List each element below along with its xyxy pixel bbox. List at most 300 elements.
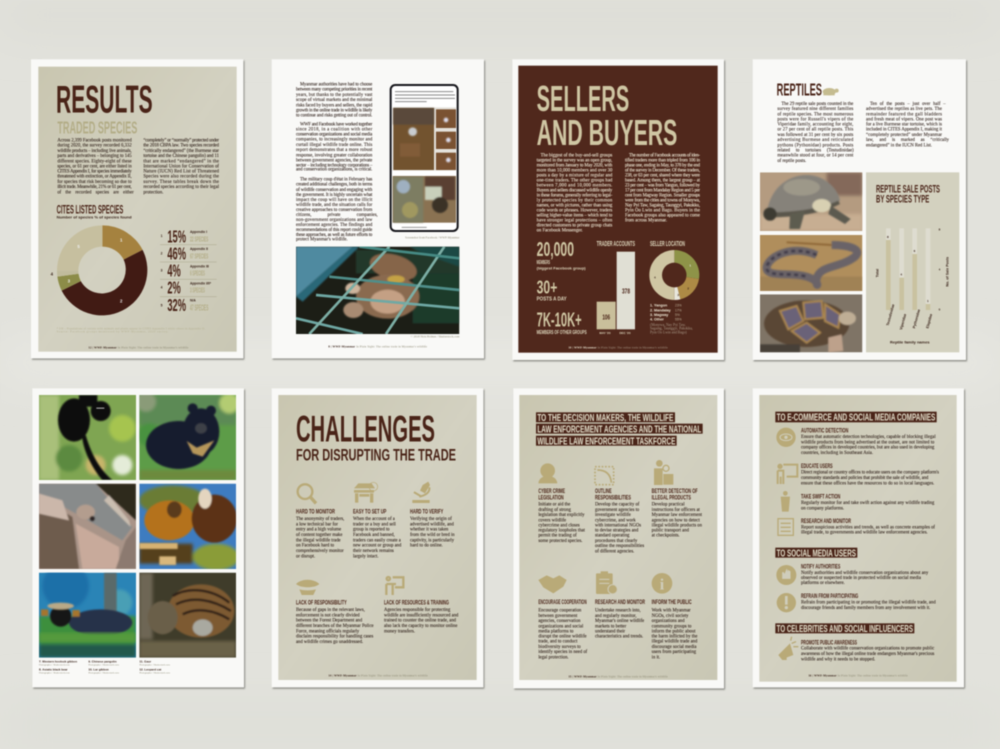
body text: curtail illegal wildlife trade online. This — [296, 143, 373, 148]
body text: WWF and Facebook have worked together — [300, 122, 373, 127]
title: challenges: FOR DISRUPTING THE TRADE — [296, 446, 456, 465]
key stats: POSTS A DAY — [537, 297, 567, 303]
column: lack of responsibility: enforcement is not clearly divided — [296, 613, 360, 618]
banner: social media users: TO SOCIAL MEDIA USERS — [777, 548, 856, 559]
icon: police hat — [296, 580, 319, 595]
photo: caged bear — [295, 246, 460, 335]
table: appendix percentages: 22 SPECIES — [190, 234, 208, 243]
column: lack of responsibility: different branches of the Myanmar Police — [296, 624, 374, 629]
table: appendix percentages: Appendix II — [190, 247, 208, 251]
body text: non-government organizations and law — [296, 218, 373, 223]
photo captions — [39, 660, 170, 674]
column: outline responsibilities: investigate wildlife — [595, 513, 631, 518]
column: hard to verify: captivity, is particularly — [410, 538, 455, 543]
icon: exclamation — [777, 593, 796, 612]
body text columns: endangered” in the IUCN Red List. — [866, 143, 932, 148]
photo captions: 8. Asiatic black bear — [39, 667, 68, 671]
photo: tortoise — [759, 172, 863, 232]
icon: person — [781, 491, 790, 512]
donut: seller location: 2 — [687, 286, 689, 290]
key stats: (biggest Facebook group) — [537, 266, 586, 270]
title: challenges: CHALLENGES — [296, 408, 435, 450]
photo captions: Photographer / Shutterstock.com — [88, 671, 119, 674]
body text columns: were from the cities and towns of Monywa, — [625, 199, 700, 204]
column: better detection: agencies on how to detect — [652, 518, 700, 523]
column: easy to set up: trader or a buy and sell — [353, 522, 397, 527]
panel: reptile bar chart: 8 — [887, 235, 889, 239]
body text columns: advertised the reptiles as live pets. The — [866, 107, 942, 112]
item: promote public awareness: awareness of how the illegal online trade endangers Myanmar's precious — [801, 652, 935, 657]
body text: Myanmar authorities have had to choose — [300, 83, 372, 88]
icon: megaphone — [778, 637, 798, 660]
column: encourage cooperation: trade, and to conduct — [538, 640, 578, 645]
body text columns: survey. These tables break down the — [143, 180, 219, 185]
icon: training — [386, 577, 403, 595]
column: cyber crime legislation: drafting of strong — [538, 508, 572, 513]
body text columns: between 7,000 and 10,000 members. — [537, 184, 612, 189]
column: encourage cooperation: identify species in need of — [538, 650, 588, 655]
item: take swift action: on company platforms. — [801, 506, 844, 511]
body text columns: of reptile species. The most numerous — [777, 112, 854, 117]
column: lack of resources and training: LACK OF RESOURCES & TRAINING — [384, 600, 449, 607]
body text: wildlife trade, and the situation calls for — [296, 203, 373, 208]
subheading: Number of species % of species found — [57, 214, 132, 219]
panel: reptile bar chart: BY SPECIES TYPE — [876, 194, 929, 206]
column: hard to monitor: on Facebook hard to — [296, 544, 335, 549]
donut: seller location: 3 — [677, 293, 679, 297]
column: lack of responsibility: Force, meaning officials regularly — [296, 629, 360, 634]
photo captions: 11. Gaur — [139, 660, 152, 664]
column: research and monitor — [595, 599, 645, 640]
photo captions: Photographer / Shutterstock.com — [139, 664, 170, 667]
body text: risks faced by buyers and sellers, the rapid — [296, 103, 373, 108]
item: educate users: ensure that these offices have the resources to do so in local languages. — [801, 481, 934, 486]
body text columns: Buyers and sellers discussed wildlife openly — [537, 189, 613, 194]
phone screenshot — [391, 85, 458, 231]
footer: 16 | WWF-Myanmar In Plain Sight: The online trade in Myanmar's wildlife — [808, 673, 908, 677]
headline banner: TO THE DECISION MAKERS, THE WILDLIFE — [537, 413, 674, 424]
panel: reptile bar chart: 6 — [914, 249, 916, 253]
bar chart: trader accounts: 106 — [602, 312, 610, 321]
body text columns: posts a day by a mixture of regular and — [537, 174, 613, 179]
title: results: RESULTS — [56, 78, 153, 122]
icon: clipboard — [596, 571, 617, 594]
column: hard to verify: HARD TO VERIFY — [410, 508, 444, 515]
body text columns: International Union for Conservation of — [143, 164, 219, 169]
body text: years, but thanks to the potentially vast — [296, 93, 373, 98]
column: easy to set up: group is reported to — [353, 528, 390, 533]
photo: leopard cat — [138, 572, 237, 658]
column: hard to verify: from the wild or bred in — [410, 533, 455, 538]
body text: and conservation organizations, is critical. — [296, 168, 372, 173]
legend: seller location: 4. Other — [650, 318, 664, 322]
body text columns — [537, 154, 701, 234]
photo captions: 9. Chinese pangolin — [88, 660, 117, 664]
column: inform the public: INFORM THE PUBLIC — [652, 599, 692, 606]
body text columns: from across Myanmar. — [625, 219, 667, 224]
body text columns: posts were for Russell's vipers of the — [777, 117, 853, 122]
page 3: sellers and buyers — [512, 59, 724, 360]
table: appendix percentages: Appendix I/II* — [190, 281, 212, 285]
column: encourage cooperation: legal protection. — [538, 655, 569, 660]
panel: reptile bar chart: No. of Sale Posts — [945, 257, 949, 287]
banner: social media users — [775, 548, 857, 559]
footnote: * I/II – Populations of certain wild animals and plants appear in CITES Appendix I while others in Appendix II. — [57, 326, 205, 330]
photo captions: 7. Western hoolock gibbon — [39, 660, 77, 664]
column: hard to verify: Verifying the origin of — [410, 517, 452, 522]
body text columns: Ten of the posts – just over half – — [870, 102, 946, 107]
page 2: authorities text and photos — [272, 59, 484, 358]
column: cyber crime legislation: some protected species. — [538, 539, 582, 544]
body text columns: law, and is marked as “critically — [866, 137, 950, 143]
panel: reptile bar chart: Testudinidae — [886, 304, 895, 326]
body text columns: code words or phrases. However, traders — [537, 209, 613, 214]
item: automatic detection — [801, 429, 936, 456]
legend: seller location: (Monywa, Nay Pyi Taw, — [650, 323, 686, 328]
column: better detection: illegal wildlife products on — [652, 523, 703, 528]
column: hard to verify: advertised wildlife, and — [410, 522, 455, 527]
donut chart — [51, 225, 147, 315]
footer: 15 | WWF-Myanmar In Plain Sight: The online trade in Myanmar's wildlife — [568, 675, 668, 679]
body text columns: included in CITES Appendix I, making it — [866, 128, 943, 133]
photo: gaur — [38, 572, 137, 658]
column: lack of responsibility: between the Forest Department and — [296, 619, 363, 624]
legend: seller location: Pyin Oo Lwin and Bago) — [650, 330, 688, 334]
column: easy to set up: new account or group and — [353, 544, 402, 549]
table: appendix percentages: 47 SPECIES — [190, 303, 208, 313]
item: automatic detection: wildlife products from being advertised at the outset, are not limited to — [801, 440, 935, 445]
column: outline responsibilities: government agencies to — [595, 508, 640, 513]
photo captions: Photographer / Shutterstock.com — [39, 671, 70, 674]
column: research and monitor: characteristics and trends. — [595, 635, 643, 640]
photo captions: 10. Lar gibbon — [88, 667, 109, 671]
body text columns: advertising Burmese and reticulated — [777, 138, 854, 143]
body text columns: 17 per cent from Mandalay Region and 5 per — [625, 189, 700, 194]
table: appendix percentages: N/A — [190, 299, 196, 303]
bar chart: trader accounts: 378 — [622, 286, 630, 295]
column: encourage cooperation: ENCOURAGE COOPERATION — [538, 599, 587, 606]
photo credit: © 2018 Nick Holmes / Shutterstock.com — [411, 334, 460, 339]
column: hard to monitor: entry and a high volume — [296, 528, 341, 533]
item: research and monitor — [801, 519, 935, 536]
icon: teacher — [778, 465, 797, 484]
body text columns: tified traders more than tripled from 106 in — [625, 159, 701, 164]
body text columns: for a live Burmese star tortoise, which is — [866, 123, 942, 128]
donut: seller location: 1 — [689, 264, 691, 268]
body text columns: Across 2,399 Facebook posts monitored — [57, 139, 132, 144]
body text columns: The 29 reptile sale posts counted in the — [781, 102, 853, 107]
photo captions: Photographer / Shutterstock.com — [139, 671, 170, 674]
column: cyber crime legislation: CYBER CRIME — [538, 488, 565, 495]
body text columns: parts and derivatives – belonging to 145 — [57, 154, 132, 159]
item: notify authorities: platforms or elsewhere. — [801, 581, 845, 586]
column: lack of responsibility — [296, 600, 374, 645]
column: research and monitor: RESEARCH AND MONITOR — [595, 599, 645, 606]
item: automatic detection: AUTOMATIC DETECTION — [801, 429, 848, 435]
body text columns: Facebook groups also appeared to come — [625, 214, 700, 219]
body text columns: The biggest of the buy-and-sell groups — [541, 154, 613, 159]
item: automatic detection: Ensure that automatic detection technologies, capable of blocking illegal — [801, 435, 936, 440]
icon: shop — [354, 482, 378, 503]
body text: impact the coup will have on the illicit — [296, 198, 373, 203]
column: outline responsibilities: to devise strategies and — [595, 529, 639, 534]
item: research and monitor: illegal trade, to governments and wildlife law enforcement agencies. — [801, 531, 928, 536]
column: hard to monitor: a low technical bar for — [296, 522, 338, 527]
panel: reptile bar chart: 4 — [939, 267, 941, 271]
body text: recommendations of this report could guide — [296, 228, 372, 233]
body text — [296, 83, 378, 243]
donut chart: 5 — [77, 244, 80, 249]
body text: the government. It is highly uncertain what — [296, 193, 373, 198]
column: encourage cooperation — [538, 599, 588, 660]
table: appendix percentages: 46% — [167, 243, 186, 263]
column: hard to verify: hard to do online. — [410, 544, 443, 549]
column: encourage cooperation: Encourage cooperation — [538, 609, 582, 614]
column: better detection: ILLEGAL PRODUCTS — [652, 495, 691, 502]
footnote — [57, 326, 205, 335]
body text columns — [777, 102, 950, 164]
headline banner: LAW ENFORCEMENT AGENCIES AND THE NATIONAL — [537, 424, 701, 435]
icon: magnifier — [298, 484, 316, 503]
key stats: 7K-10K+ — [537, 310, 582, 332]
body text columns: cent from Magway Region. Smaller groups — [625, 194, 700, 199]
column: research and monitor: Undertake research into, — [595, 609, 641, 614]
column: encourage cooperation: agencies, conservation — [538, 619, 581, 624]
column: better detection: public transport and — [652, 529, 690, 534]
table: appendix percentages: 32% — [167, 295, 186, 315]
icon: outline diagram — [595, 467, 614, 485]
body text: creative approaches to conservation from — [296, 208, 373, 213]
legend: seller location: 2. Mandalay — [650, 308, 672, 312]
body text columns: related to tortoises (Testudinidae) — [777, 148, 854, 153]
item: take swift action: TAKE SWIFT ACTION — [801, 494, 840, 500]
body text: companies, to increasingly monitor and — [296, 138, 373, 143]
page 6: challenges — [272, 388, 483, 687]
page 1: results: CITES LISTED SPECIES — [57, 202, 123, 216]
column: outline responsibilities: with international NGOs — [595, 523, 641, 528]
icon: checklist — [778, 519, 793, 535]
table: appendix percentages — [160, 227, 217, 315]
item: take swift action: Regularly monitor for and take swift action against any wildlife trading — [801, 501, 935, 506]
column: better detection: BETTER DETECTION OF — [652, 488, 698, 495]
table: appendix percentages: 15% — [167, 227, 186, 247]
column: better detection — [652, 488, 703, 539]
table: appendix percentages: 6 SPECIES — [190, 269, 205, 278]
column: cyber crime legislation: permit the trading of — [538, 534, 577, 539]
legend: seller location — [650, 304, 693, 334]
column: encourage cooperation: disrupt the online wildlife — [538, 635, 587, 640]
body text columns: “completely protected” under Myanmar — [866, 132, 942, 138]
legend: seller location: 1. Yangon — [650, 304, 667, 308]
item: notify authorities: Notify authorities and wildlife conservation organizations about any — [801, 571, 929, 576]
body text: sector – including technology corporations – — [296, 164, 373, 169]
table: appendix percentages: 4 — [161, 286, 163, 290]
body text columns: ly protected species by their common — [537, 199, 613, 204]
table: appendix percentages: 3 — [161, 269, 163, 273]
body text columns: The number of Facebook accounts of iden- — [629, 154, 700, 159]
footnote: Source: Facebook groups monitored by WWF-Myanmar, 2020 survey. — [57, 330, 169, 335]
photo captions: Photographer / Shutterstock.com — [88, 664, 119, 667]
column: encourage cooperation: between government — [538, 614, 578, 619]
page 8: recommendations to companies and users — [753, 388, 964, 687]
key stats: MEMBERS OF OTHER GROUPS — [537, 330, 587, 336]
item: refrain from participating — [801, 594, 936, 611]
item: refrain from participating: REFRAIN FROM PARTICIPATING — [801, 594, 859, 600]
column: research and monitor: and regularly monitor, — [595, 614, 637, 619]
column: research and monitor: Myanmar's online wildlife — [595, 619, 644, 624]
column: encourage cooperation: media platforms to — [538, 629, 574, 634]
body text columns: one-time traders. The other groups had — [537, 179, 613, 184]
legend: seller location: 17% — [675, 308, 682, 312]
body text columns: during 2020, the survey recorded 6,332 — [57, 144, 132, 149]
column: lack of resources and training: wildlife are insufficiently resourced and — [384, 613, 459, 618]
icon: info — [652, 573, 672, 594]
key stats — [537, 239, 587, 336]
table: appendix percentages: 5 — [161, 304, 163, 308]
body text columns: “critically endangered” (the Burmese star — [143, 148, 219, 154]
page 7: recommendations to decision makers — [513, 388, 724, 688]
donut chart: 2 — [120, 298, 123, 303]
donut: seller location: 4 — [654, 276, 656, 280]
body text columns: was followed at 31 per cent by six posts — [777, 133, 854, 138]
body text columns: phase one, ending in May, to 378 by the end — [625, 164, 701, 169]
item: promote public awareness: Collaborate with wildlife conservation organizations to promote public — [801, 647, 934, 652]
panel: reptile bar chart: Reptile family names — [890, 340, 930, 345]
column: better detection: Myanmar law enforcement — [652, 513, 703, 518]
item: promote public awareness: wildlife and why it needs to be stopped. — [801, 657, 875, 662]
panel: reptile bar chart: Viperidae — [899, 313, 907, 330]
title: challenges — [296, 408, 456, 465]
column: inform the public: illegal wildlife trade and — [652, 640, 698, 645]
body text columns: Pyin Oo Lwin and Bago. Buyers in the — [625, 209, 700, 214]
legend: seller location: 3. Magway — [650, 313, 669, 317]
bar chart: trader accounts: MAY '20 — [599, 331, 611, 335]
body text: report demonstrates that a more robust — [296, 148, 373, 153]
column: cyber crime legislation — [538, 488, 586, 544]
bar chart: trader accounts: DEC '20 — [619, 331, 631, 335]
body text columns: 23 per cent – was from Yangon, followed by — [625, 184, 701, 189]
body text columns: of the recorded species are either — [57, 190, 134, 195]
column: cyber crime legislation: Initiate or aid the — [538, 503, 570, 508]
body text columns: on Facebook Messenger. — [537, 229, 583, 234]
banner: celebrities: TO CELEBRITIES AND SOCIAL INFLUENCERS — [777, 624, 913, 635]
legend: seller location: 5% — [675, 313, 680, 317]
column: lack of responsibility: LACK OF RESPONSIBILITY — [296, 600, 347, 607]
bar chart: trader accounts — [597, 239, 635, 335]
title: AND BUYERS — [537, 112, 677, 153]
icon: info: i — [660, 576, 665, 593]
panel: reptile bar chart — [866, 172, 959, 352]
body text columns: for species that risk becoming so due to — [57, 180, 132, 185]
column: cyber crime legislation: LEGISLATION — [538, 495, 564, 502]
body text columns: monitored from January to May 2020, with — [537, 164, 613, 169]
column: inform the public: Work with Myanmar — [652, 609, 691, 614]
body text: of wildlife conservation and engaging with — [296, 188, 373, 193]
icon: handshake — [538, 575, 567, 593]
photo: black gibbon — [38, 394, 137, 481]
panel: reptile bar chart: Total — [876, 269, 880, 277]
icon: microscope — [412, 482, 430, 503]
item: educate users: community standards and policies that prohibit the sale of wildlife, and — [801, 476, 929, 481]
panel: reptile bar chart: 0 — [939, 307, 941, 311]
footer: 8 | WWF-Myanmar In Plain Sight: The online trade in Myanmar's wildlife — [328, 345, 428, 349]
panel: reptile bar chart: 4 — [900, 273, 902, 277]
column: lack of resources and training: Agencies responsible for protecting — [384, 608, 451, 613]
body text: The military coup d'état in February has — [300, 178, 373, 183]
item: notify authorities: observed or suspected trade in protected wildlife on social media — [801, 576, 921, 581]
panel: reptile bar chart: Elapidae — [925, 313, 933, 329]
body text: since 2018, in a coalition with other — [296, 127, 373, 132]
panel: reptile bar chart: 1 — [927, 299, 929, 303]
title: SELLERS — [537, 78, 629, 119]
bar chart: trader accounts: TRADER ACCOUNTS — [597, 239, 635, 248]
body text: created additional challenges, both in terms — [296, 183, 373, 188]
body text columns: Viperidae family, accounting for eight, — [777, 123, 853, 128]
icon: tortoise — [823, 88, 839, 95]
body text: enforcement agencies. The findings and — [296, 223, 373, 228]
body text: citizens, private companies, — [296, 213, 378, 218]
item: automatic detection: company offices in developed countries, but are also used in developing — [801, 446, 935, 451]
donut chart: 3 — [68, 279, 71, 284]
body text columns: based. Among them, the largest group – at — [625, 179, 701, 184]
column: inform the public: in it. — [652, 655, 660, 660]
item: educate users: EDUCATE USERS — [801, 464, 833, 470]
body text columns: recorded species according to their legal — [143, 185, 220, 190]
body text columns: wildlife products – including live animals, — [57, 149, 132, 154]
footer: 14 | WWF-Myanmar In Plain Sight: The online trade in Myanmar's wildlife — [328, 673, 428, 677]
table: appendix percentages: Appendix III — [190, 264, 209, 268]
banner: celebrities — [775, 623, 914, 635]
item: refrain from participating: discourage friends and family members from any involvement with it. — [801, 606, 930, 611]
item: educate users: Direct regional or country offices to educate users on the company platform's — [801, 471, 939, 476]
column: inform the public: users from participating — [652, 650, 697, 655]
body text: between many competing priorities in recent — [296, 88, 373, 93]
column: inform the public: NGOs, civil society — [652, 614, 689, 619]
panel: reptile bar chart: 8 — [939, 227, 941, 231]
column: hard to monitor: comprehensively monitor — [296, 549, 344, 554]
table: appendix percentages: 3 SPECIES — [190, 286, 205, 295]
column: outline responsibilities: Develop the capacity of — [595, 503, 640, 508]
body text: growth in the online trade in wildlife is likely — [296, 108, 373, 113]
column: outline responsibilities: RESPONSIBILITIES — [595, 495, 631, 502]
column: hard to verify — [410, 508, 455, 549]
body text: response, involving greater collaboration — [296, 153, 373, 158]
column: cyber crime legislation: covers wildlife — [538, 518, 566, 523]
body text columns: meanwhile stood at four, or 14 per cent — [777, 154, 854, 159]
column: hard to verify: whether it was taken — [410, 528, 449, 533]
column: outline responsibilities: cybercrime, and work — [595, 518, 636, 523]
body text columns: the 2018 CBPA law. Two species recorded — [143, 144, 220, 149]
column: lack of responsibility: Because of gaps in the relevant laws, — [296, 608, 365, 613]
item: promote public awareness: PROMOTE PUBLIC AWARENESS — [801, 640, 857, 646]
photo captions: Photographer / Shutterstock.com — [39, 664, 70, 667]
table: appendix percentages: 1 — [161, 234, 163, 238]
body text columns: remainder featured the gall bladders — [866, 112, 942, 117]
body text columns: 238, or 63 per cent, shared where they were — [625, 174, 700, 179]
body text columns: and fresh meat of vipers. One post was — [866, 117, 942, 122]
item: notify authorities — [801, 565, 929, 586]
donut chart: 4 — [51, 272, 54, 277]
banner: e-commerce — [775, 412, 937, 424]
donut: seller location: SELLER LOCATION — [650, 239, 685, 248]
column: hard to monitor: or disrupt. — [296, 554, 315, 559]
column: outline responsibilities: standard operating — [595, 534, 630, 539]
photo captions: 12. Leopard cat — [139, 667, 161, 671]
item: notify authorities: NOTIFY AUTHORITIES — [801, 565, 840, 571]
column: inform the public: organizations and — [652, 619, 685, 624]
icon: stop hand — [776, 565, 796, 585]
legend: seller location: 55% — [675, 318, 682, 322]
